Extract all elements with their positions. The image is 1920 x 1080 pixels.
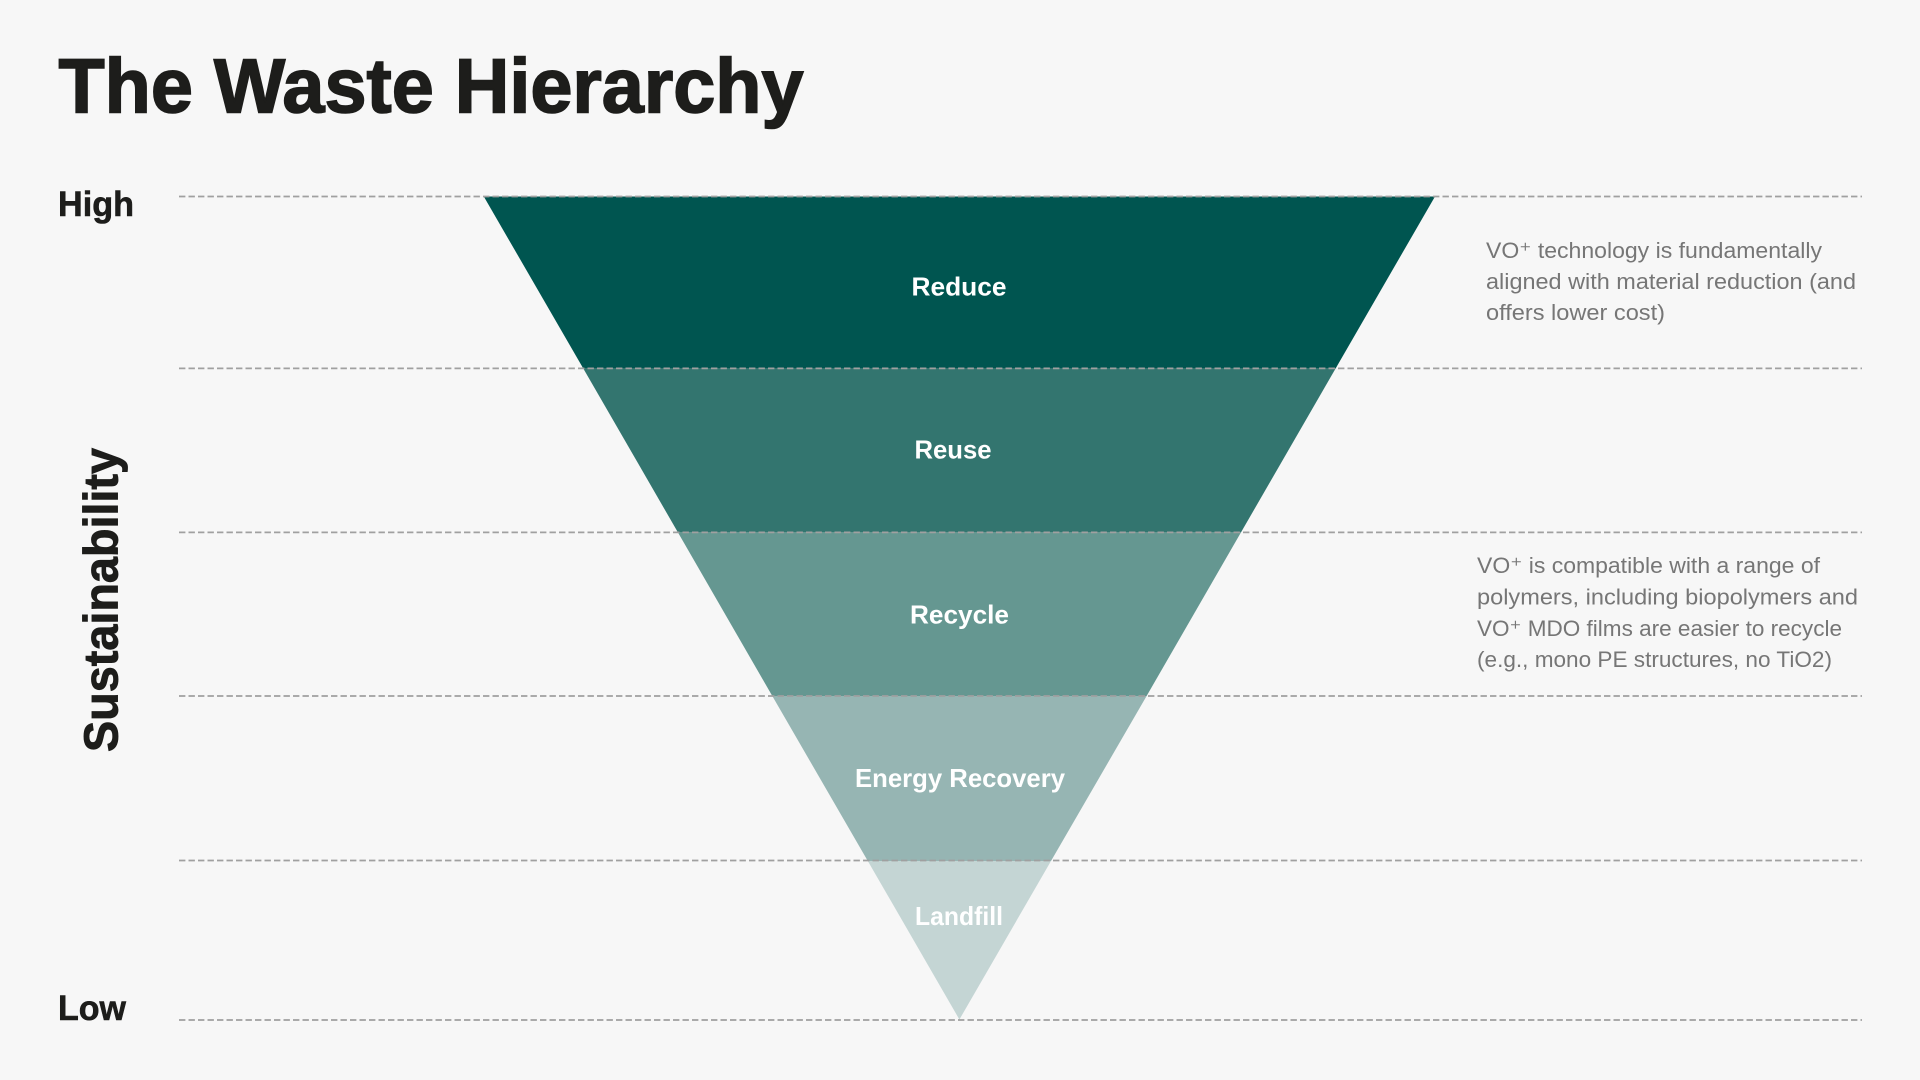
tier: reduce: Reduce [912,272,1006,302]
tier: recycle [678,532,1241,696]
note: recycle: VO⁺ MDO films are easier to recycle [1477,616,1842,641]
note: reduce: aligned with material reduction (and [1486,269,1856,294]
tier: recycle: Recycle [910,600,1009,630]
note: recycle: polymers, including biopolymers and [1477,584,1858,610]
tier: landfill: Landfill [915,901,1003,931]
inverted pyramid chart [484,196,1435,1020]
tier: landfill [868,861,1051,1020]
title: The Waste Hierarchy [58,44,804,130]
tier: reduce [484,196,1435,368]
axis label: low: Low [58,989,127,1028]
tier: energy recovery: Energy Recovery [855,763,1066,793]
tier: reuse: Reuse [914,434,992,464]
note: recycle [1477,553,1858,672]
tier: reuse [583,368,1336,532]
note: reduce: offers lower cost) [1486,300,1665,325]
axis label: sustainability: Sustainability [76,448,128,752]
note: reduce: VO⁺ technology is fundamentally [1486,238,1823,263]
note: reduce [1486,238,1856,325]
note: recycle: VO⁺ is compatible with a range of [1477,553,1821,578]
axis label: high: High [58,185,134,224]
tier: energy recovery [772,696,1147,861]
note: recycle: (e.g., mono PE structures, no TiO2) [1477,647,1832,672]
